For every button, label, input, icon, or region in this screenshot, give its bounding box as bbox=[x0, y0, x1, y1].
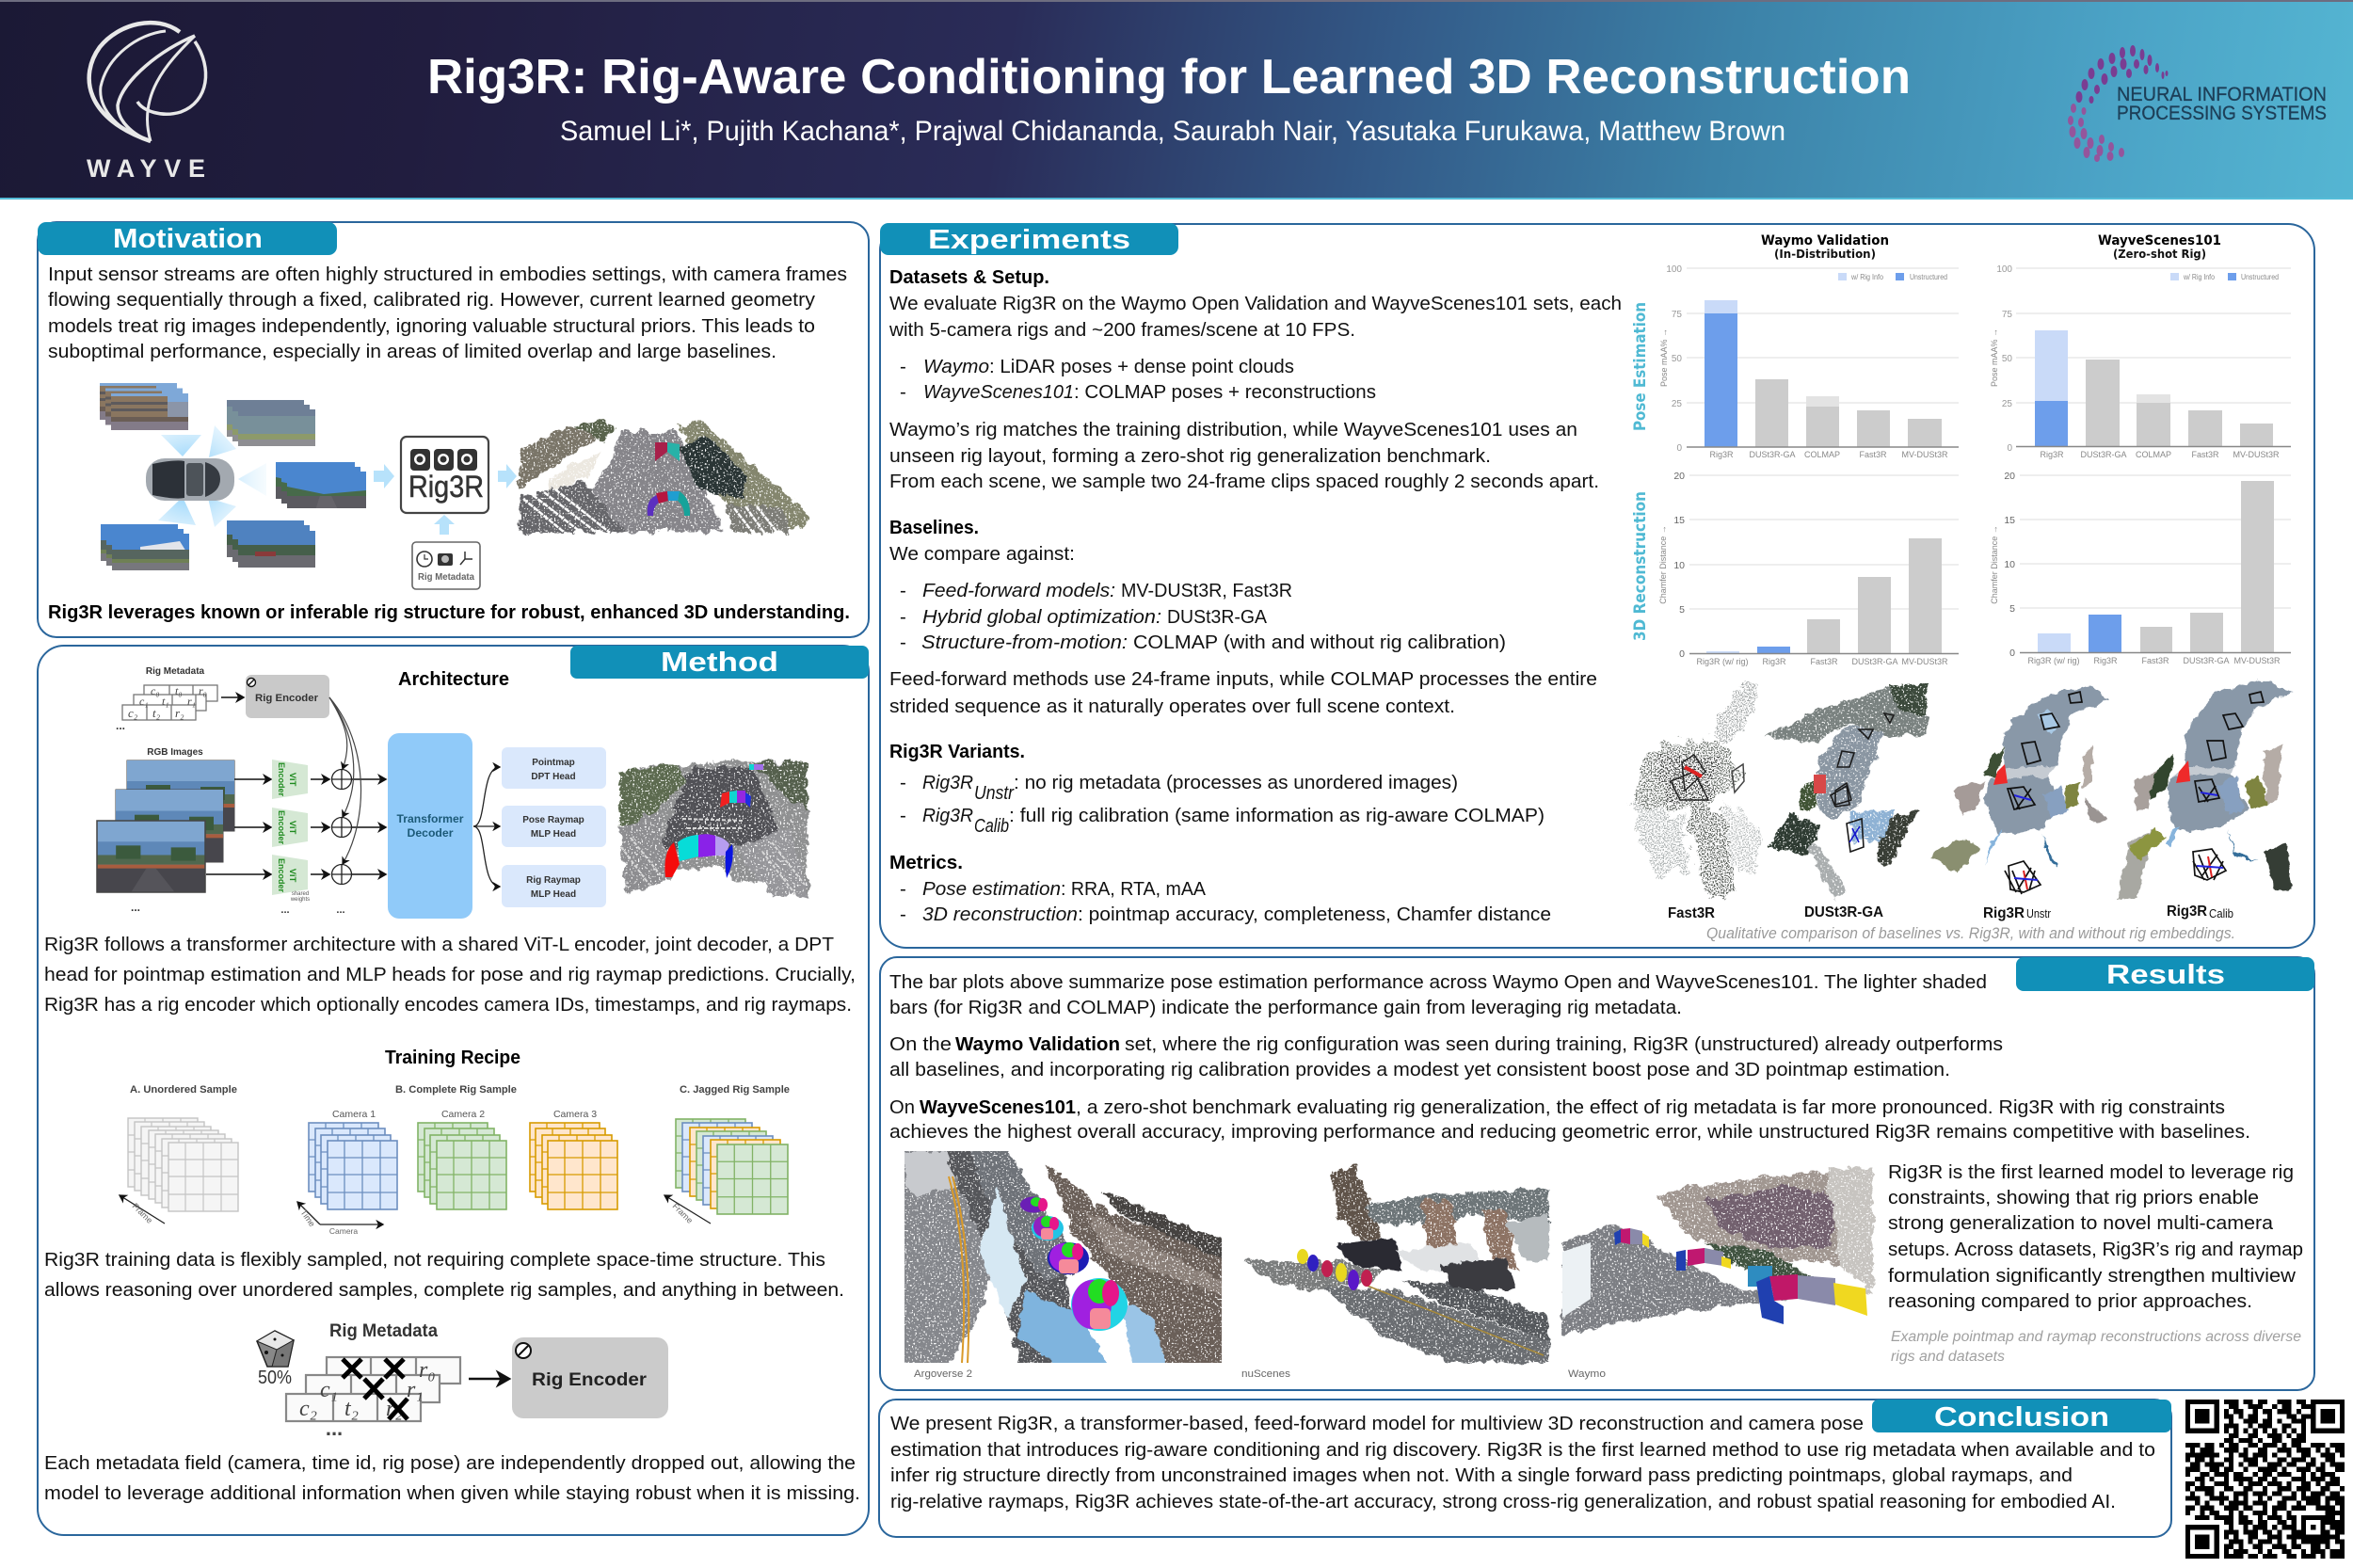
image: Fast3R reconstruction bbox=[1626, 681, 1760, 899]
icon: Rig3R box bbox=[401, 437, 488, 513]
image: Rig3R calibrated reconstruction bbox=[2118, 680, 2293, 899]
arrows: pipeline bbox=[374, 464, 517, 535]
rig metadata input: r₂ bbox=[175, 706, 184, 720]
text: rig3r variants: : full rig calibration (same information as rig-aware COLMAP) bbox=[1009, 805, 1545, 826]
diagram: metadata dropout bbox=[257, 1321, 668, 1440]
bar chart: WayveScenes pose: 50 bbox=[2002, 354, 2012, 364]
bar chart: WayveScenes chamfer: 20 bbox=[2004, 471, 2015, 482]
vit encoders: ... bbox=[336, 904, 345, 916]
text: training description: allows reasoning over unordered samples, complete rig samples, and anything in between. bbox=[44, 1279, 844, 1301]
sample B: complete rig: Camera bbox=[329, 1226, 358, 1236]
bar chart: Waymo pose: DUSt3R-GA bbox=[1749, 450, 1796, 459]
text: baselines: - bbox=[900, 580, 906, 601]
text: motivation body bbox=[48, 264, 847, 362]
caption: example reconstructions bbox=[1891, 1329, 2301, 1365]
text: baselines: Hybrid global optimization: bbox=[922, 606, 1161, 628]
bar chart: Waymo pose: 100 bbox=[1666, 264, 1682, 275]
table: metadata rows: ... bbox=[326, 1416, 343, 1440]
heading: method tab bbox=[570, 646, 869, 679]
bar chart: Waymo chamfer: 20 bbox=[1673, 471, 1685, 482]
label: pose estimation axis: Pose Estimation bbox=[1631, 302, 1650, 431]
title: Rig3R: Rig-Aware Conditioning for Learned 3D Reconstruction bbox=[427, 50, 1911, 104]
logo: Wayve: WAYVE bbox=[87, 154, 205, 183]
vit encoders: ViT bbox=[287, 773, 297, 786]
bar chart: Waymo pose: Unstructured bbox=[1910, 272, 1947, 281]
text: baselines: We compare against: bbox=[889, 543, 1075, 565]
label: rig metadata: Rig Metadata bbox=[329, 1321, 438, 1341]
text: results summary: On the bbox=[889, 1033, 952, 1055]
bar chart: WayveScenes chamfer: DUSt3R-GA bbox=[2183, 656, 2230, 665]
bar chart: Waymo chamfer: Chamfer Distance → bbox=[1658, 525, 1668, 604]
text: metrics: : RRA, RTA, mAA bbox=[1061, 878, 1206, 900]
bar chart: WayveScenes pose: 100 bbox=[1996, 264, 2012, 275]
bar chart: Waymo chamfer: 10 bbox=[1673, 560, 1685, 571]
text: conclusion body: estimation that introduces rig-aware conditioning and rig discovery. Rig3R is the first learned method to use rig metadata when available and to bbox=[890, 1439, 2155, 1461]
labels: reconstruction methods: Rig3R bbox=[1983, 905, 2025, 921]
icon: rig metadata box bbox=[412, 542, 480, 589]
bar chart: Waymo chamfer: 15 bbox=[1673, 515, 1685, 526]
rig encoder block: Rig Encoder bbox=[255, 693, 319, 704]
sample B: complete rig: Camera 1 bbox=[332, 1109, 376, 1120]
bar chart: Waymo pose: MV-DUSt3R bbox=[1901, 450, 1948, 459]
text: results summary: On bbox=[889, 1096, 915, 1118]
vit encoders: shared bbox=[292, 891, 309, 897]
bar chart: WayveScenes chamfer: Chamfer Distance → bbox=[1990, 525, 1999, 604]
table: metadata rows: c₁ bbox=[320, 1378, 338, 1402]
rig metadata input: t₂ bbox=[152, 706, 161, 720]
arrows: images to encoders bbox=[206, 779, 386, 874]
heading: architecture: Architecture bbox=[398, 668, 509, 690]
bar chart: WayveScenes pose: COLMAP bbox=[2136, 450, 2171, 459]
vit encoders: Encoder bbox=[276, 762, 286, 796]
text: rig3r variants: Unstr bbox=[974, 782, 1015, 804]
text: results summary: set, where the rig configuration was seen during training, Rig3R (unstructured) already outperforms bbox=[1125, 1033, 2003, 1055]
rig metadata input: r₁ bbox=[187, 695, 196, 708]
caption: qualitative comparison: Qualitative comparison of baselines vs. Rig3R, with and without rig embeddings. bbox=[1706, 924, 2235, 942]
labels: dataset names: Waymo bbox=[1568, 1368, 1606, 1380]
text: datasets and setup: WayveScenes101 bbox=[923, 381, 1074, 403]
heading: WayveScenes101: (Zero-shot Rig) bbox=[2113, 247, 2206, 261]
panel: experiments bbox=[880, 223, 2314, 948]
output heads: MLP Head bbox=[531, 889, 576, 900]
label: 3D reconstruction axis: 3D Reconstruction bbox=[1631, 491, 1650, 641]
label: dropout rate: 50% bbox=[258, 1368, 292, 1388]
text: baselines: Baselines. bbox=[889, 517, 979, 538]
bar chart: WayveScenes pose bbox=[1990, 264, 2291, 459]
image: DUSt3R-GA reconstruction bbox=[1765, 684, 1928, 901]
heading: results tab bbox=[2016, 957, 2314, 991]
text: baselines: strided sequence as it naturally operates over full scene context. bbox=[889, 696, 1455, 717]
vit encoders: Encoder bbox=[276, 810, 286, 844]
bar chart: Waymo pose bbox=[1659, 264, 1959, 459]
plus junctions bbox=[331, 770, 352, 885]
icon: camera view fans bbox=[158, 425, 266, 527]
text: motivation body: suboptimal performance, especially in areas of limited overlap and large baselines. bbox=[48, 341, 776, 362]
text: results summary bbox=[889, 971, 2250, 1143]
labels: reconstruction methods: Fast3R bbox=[1668, 905, 1715, 921]
text: baselines: Feed-forward methods use 24-frame inputs, while COLMAP processes the entire bbox=[889, 668, 1597, 690]
text: conclusion body: We present Rig3R, a transformer-based, feed-forward model for multiview 3D reconstruction and camera pose bbox=[890, 1413, 1864, 1434]
text: results takeaway: reasoning compared to prior approaches. bbox=[1888, 1290, 2252, 1312]
bar chart: WayveScenes pose: 0 bbox=[2007, 443, 2012, 454]
panel: conclusion bbox=[879, 1400, 2171, 1537]
labels: reconstruction methods: DUSt3R-GA bbox=[1804, 904, 1883, 920]
header banner bbox=[0, 0, 2353, 200]
bar chart: WayveScenes chamfer: MV-DUSt3R bbox=[2233, 656, 2281, 665]
text: results takeaway: Rig3R is the first learned model to leverage rig bbox=[1888, 1161, 2294, 1183]
caption: example reconstructions: Example pointmap and raymap reconstructions across diverse bbox=[1891, 1329, 2301, 1345]
text: results takeaway: strong generalization to novel multi-camera bbox=[1888, 1212, 2274, 1234]
text: baselines bbox=[889, 517, 1597, 717]
image: street point cloud bbox=[520, 419, 809, 533]
text: rig3r variants: - bbox=[900, 772, 906, 793]
diagram: training samples bbox=[120, 1084, 790, 1236]
text: architecture description bbox=[44, 934, 856, 1016]
text: baselines: Feed-forward models: bbox=[922, 580, 1115, 601]
heading: experiments tab: Experiments bbox=[928, 225, 1130, 255]
bar chart: Waymo chamfer: Rig3R (w/ rig) bbox=[1696, 657, 1749, 666]
bar chart: Waymo chamfer bbox=[1658, 471, 1959, 666]
logo: Wayve bbox=[87, 23, 206, 183]
text: datasets and setup: Waymo’s rig matches the training distribution, while WayveScenes101 uses an bbox=[889, 419, 1577, 440]
heading: results tab: Results bbox=[2106, 960, 2225, 990]
bar chart: WayveScenes pose: 25 bbox=[2002, 399, 2012, 409]
arrow: metadata to rig encoder bbox=[469, 1378, 509, 1380]
icon: rig metadata box: Rig Metadata bbox=[418, 572, 474, 583]
text: rig3r variants: Rig3R bbox=[922, 805, 973, 826]
sample A: unordered: Frame bbox=[131, 1201, 154, 1225]
image: point cloud output bbox=[619, 760, 808, 902]
text: conclusion body: rig-relative raymaps, Rig3R achieves state-of-the-art accuracy, strong cross-rig generalization, and robust spatial reasoning for embodied AI. bbox=[890, 1491, 2116, 1512]
text: metrics: : pointmap accuracy, completeness, Chamfer distance bbox=[1078, 904, 1551, 925]
table: metadata rows: r₀ bbox=[419, 1358, 436, 1383]
labels: dataset names: nuScenes bbox=[1241, 1368, 1291, 1380]
image: Rig3R unstructured reconstruction bbox=[1929, 685, 2108, 894]
sample C: jagged rig: C. Jagged Rig Sample bbox=[680, 1084, 790, 1096]
rig metadata input bbox=[116, 666, 217, 732]
panel: results bbox=[880, 957, 2314, 1390]
text: results takeaway: constraints, showing that rig priors enable bbox=[1888, 1187, 2259, 1208]
text: metrics: - bbox=[900, 878, 906, 900]
bar chart: WayveScenes chamfer: Fast3R bbox=[2141, 656, 2169, 665]
sample B: complete rig: Camera 2 bbox=[441, 1109, 485, 1120]
bar chart: WayveScenes pose: DUSt3R-GA bbox=[2080, 450, 2127, 459]
text: datasets and setup: : LiDAR poses + dense point clouds bbox=[989, 356, 1294, 377]
image: Argoverse 2 reconstruction bbox=[899, 1146, 1228, 1369]
text: architecture description: head for pointmap estimation and MLP heads for pose and rig raymap predictions. Crucially, bbox=[44, 964, 856, 985]
bar chart: WayveScenes chamfer: 0 bbox=[2009, 648, 2015, 659]
bar chart: WayveScenes pose: Rig3R bbox=[2040, 450, 2064, 459]
text: results summary: The bar plots above summarize pose estimation performance across Waymo Open and WayveScenes101. The lighter shaded bbox=[889, 971, 1987, 993]
text: results takeaway bbox=[1888, 1161, 2303, 1312]
bar chart: WayveScenes pose: Fast3R bbox=[2191, 450, 2219, 459]
bar chart: WayveScenes pose: w/ Rig Info bbox=[2183, 272, 2215, 281]
transformer decoder block bbox=[388, 733, 472, 919]
callout: motivation takeaway: Rig3R leverages known or inferable rig structure for robust, enhanced 3D understanding. bbox=[48, 601, 850, 623]
text: rig3r variants: Calib bbox=[974, 815, 1009, 837]
text: conclusion body bbox=[890, 1413, 2155, 1512]
sample C: jagged rig bbox=[664, 1084, 790, 1225]
text: results takeaway: setups. Across datasets, Rig3R’s rig and raymap bbox=[1888, 1239, 2303, 1260]
text: metrics: 3D reconstruction bbox=[922, 904, 1078, 925]
text: datasets and setup: Waymo bbox=[923, 356, 989, 377]
logo: NeurIPS: NEURAL INFORMATION bbox=[2117, 84, 2327, 105]
logo: NeurIPS bbox=[2068, 45, 2327, 162]
labels: reconstruction methods: Rig3R bbox=[2167, 904, 2207, 920]
text: datasets and setup: with 5-camera rigs and ~200 frames/scene at 10 FPS. bbox=[888, 319, 1355, 341]
heading: Waymo Validation: Waymo Validation bbox=[1761, 233, 1889, 248]
bar chart: Waymo pose: Pose mAA% → bbox=[1659, 328, 1669, 387]
labels: reconstruction methods: Calib bbox=[2209, 906, 2233, 920]
icon: dice bbox=[257, 1331, 294, 1367]
heading: WayveScenes101: WayveScenes101 bbox=[2098, 233, 2221, 248]
transformer decoder block: Decoder bbox=[407, 828, 454, 840]
heading: conclusion tab bbox=[1872, 1400, 2171, 1432]
bar chart: WayveScenes pose: MV-DUSt3R bbox=[2233, 450, 2280, 459]
rgb images input: ... bbox=[131, 901, 140, 914]
figure: rig overview bbox=[100, 383, 809, 589]
text: conclusion body: infer rig structure directly from unconstrained images when not. With a single forward pass predicting pointmaps, global raymaps, and bbox=[890, 1464, 2073, 1486]
text: rig3r variants: : no rig metadata (processes as unordered images) bbox=[1014, 772, 1458, 793]
text: motivation body: models treat rig images independently, ignoring valuable structural priors. This leads to bbox=[48, 315, 815, 337]
bar chart: Waymo chamfer: Rig3R bbox=[1762, 657, 1786, 666]
text: baselines: COLMAP (with and without rig calibration) bbox=[1133, 632, 1506, 653]
text: architecture description: Rig3R follows a transformer architecture with a shared ViT-L encoder, joint decoder, a DPT bbox=[44, 934, 834, 955]
diagram: architecture bbox=[97, 666, 808, 919]
icon: car top view bbox=[146, 458, 234, 501]
text: datasets and setup: - bbox=[900, 356, 906, 377]
rig metadata input: t₁ bbox=[162, 695, 169, 708]
rig metadata input: ... bbox=[116, 719, 125, 732]
rig encoder block bbox=[512, 1337, 668, 1418]
sample B: complete rig: B. Complete Rig Sample bbox=[395, 1084, 517, 1096]
bar chart: Waymo pose: w/ Rig Info bbox=[1850, 272, 1883, 281]
text: results summary: WayveScenes101 bbox=[920, 1096, 1076, 1118]
text: rig3r variants: - bbox=[900, 805, 906, 826]
bar chart: WayveScenes chamfer: 15 bbox=[2004, 515, 2015, 526]
arrow: metadata to encoder bbox=[221, 696, 244, 698]
arrows: decoder to heads bbox=[473, 767, 500, 887]
heading: Waymo Validation: (In-Distribution) bbox=[1774, 247, 1876, 261]
output heads bbox=[502, 747, 606, 907]
vit encoders bbox=[272, 760, 345, 916]
output heads: Pointmap bbox=[532, 758, 575, 768]
text: training description bbox=[44, 1249, 844, 1301]
bar chart: Waymo chamfer: DUSt3R-GA bbox=[1851, 657, 1898, 666]
text: datasets and setup: From each scene, we sample two 24-frame clips spaced roughly 2 seconds apart. bbox=[889, 471, 1599, 492]
vit encoders: ViT bbox=[287, 869, 297, 882]
text: motivation body: Input sensor streams are often highly structured in embodies settings, with camera frames bbox=[48, 264, 847, 285]
heading: training recipe: Training Recipe bbox=[385, 1047, 520, 1068]
text: dropout description: model to leverage additional information when given while staying robust when it is missing. bbox=[44, 1482, 860, 1504]
output heads: MLP Head bbox=[531, 829, 576, 840]
sample B: complete rig bbox=[297, 1084, 617, 1236]
sample C: jagged rig: Frame bbox=[671, 1201, 695, 1225]
table: metadata rows bbox=[286, 1357, 460, 1440]
bar chart: WayveScenes chamfer bbox=[1990, 471, 2291, 665]
logo: NeurIPS: PROCESSING SYSTEMS bbox=[2117, 103, 2327, 124]
rig metadata input: Rig Metadata bbox=[146, 666, 205, 677]
heading: method tab: Method bbox=[661, 648, 778, 678]
rig metadata input: t₀ bbox=[175, 684, 183, 697]
text: results summary: , a zero-shot benchmark evaluating rig generalization, the effect of rig metadata is far more pronounced. Rig3R with rig constraints bbox=[1076, 1096, 2225, 1118]
icon: Rig3R box: Rig3R bbox=[408, 470, 484, 504]
bar chart: Waymo chamfer: 5 bbox=[1679, 604, 1685, 616]
labels: dataset names bbox=[914, 1368, 1606, 1380]
bar chart: Waymo chamfer: 0 bbox=[1679, 648, 1685, 660]
bar chart: WayveScenes pose: Unstructured bbox=[2241, 272, 2279, 281]
vit encoders: Encoder bbox=[276, 858, 286, 892]
text: baselines: - bbox=[900, 606, 906, 628]
labels: reconstruction methods: Unstr bbox=[2026, 906, 2052, 920]
text: results takeaway: formulation significantly strengthen multiview bbox=[1888, 1265, 2296, 1287]
table: metadata rows: t₂ bbox=[344, 1397, 359, 1421]
panel: method bbox=[38, 646, 869, 1535]
heading: Waymo Validation bbox=[1761, 233, 1889, 261]
transformer decoder block: Transformer bbox=[397, 814, 464, 825]
sample A: unordered: A. Unordered Sample bbox=[130, 1084, 237, 1096]
rig metadata input: c₀ bbox=[151, 684, 160, 697]
authors: Samuel Li*, Pujith Kachana*, Prajwal Chidananda, Saurabh Nair, Yasutaka Furukawa, Matthew Brown bbox=[560, 116, 1785, 147]
text: results summary: achieves the highest overall accuracy, improving performance and reducing geometric error, while unstructured Rig3R remains competitive with baselines. bbox=[889, 1121, 2250, 1143]
sample B: complete rig: Camera 3 bbox=[553, 1109, 597, 1120]
text: datasets and setup: : COLMAP poses + reconstructions bbox=[1074, 381, 1376, 403]
rgb images input: RGB Images bbox=[147, 747, 203, 758]
vit encoders: ViT bbox=[287, 821, 297, 834]
bar chart: Waymo pose: 25 bbox=[1672, 399, 1682, 409]
text: metrics bbox=[889, 852, 1551, 925]
text: rig3r variants: Rig3R bbox=[922, 772, 973, 793]
bar chart: WayveScenes pose: Pose mAA% → bbox=[1990, 328, 1999, 387]
text: results summary: Waymo Validation bbox=[955, 1033, 1120, 1055]
heading: motivation tab bbox=[38, 222, 337, 255]
rig metadata input: r₀ bbox=[199, 684, 207, 697]
image stacks: camera frames bbox=[100, 383, 366, 570]
labels: dataset names: Argoverse 2 bbox=[914, 1368, 972, 1380]
text: results summary: bars (for Rig3R and COLMAP) indicate the performance gain from leveraging rig metadata. bbox=[889, 997, 1682, 1018]
table: metadata rows: r₂ bbox=[386, 1397, 403, 1421]
bar chart: Waymo chamfer: Fast3R bbox=[1810, 657, 1838, 666]
text: results summary: all baselines, and incorporating rig calibration provides a modest yet consistent boost pose and 3D pointmap estimation. bbox=[889, 1059, 1950, 1080]
rig encoder block: Rig Encoder bbox=[532, 1369, 647, 1390]
heading: experiments tab bbox=[880, 223, 1178, 255]
bar chart: Waymo pose: Rig3R bbox=[1709, 450, 1734, 459]
text: dropout description: Each metadata field (camera, time id, rig pose) are independently dropped out, allowing the bbox=[44, 1452, 856, 1474]
text: rig3r variants: Rig3R Variants. bbox=[889, 741, 1025, 762]
bar chart: Waymo pose: 50 bbox=[1672, 354, 1682, 364]
bar chart: WayveScenes chamfer: 10 bbox=[2004, 559, 2015, 570]
sample B: complete rig: Time bbox=[298, 1208, 317, 1228]
text: rig3r variants bbox=[889, 741, 1545, 837]
sample A: unordered bbox=[120, 1084, 238, 1225]
output heads: Rig Raymap bbox=[526, 875, 581, 886]
bar chart: WayveScenes pose: 75 bbox=[2002, 310, 2012, 320]
image: nuScenes reconstruction bbox=[1242, 1167, 1549, 1363]
text: training description: Rig3R training data is flexibly sampled, not requiring complete space-time structure. This bbox=[44, 1249, 825, 1271]
text: datasets and setup: Datasets & Setup. bbox=[889, 266, 1049, 288]
output heads: Pose Raymap bbox=[522, 815, 584, 825]
arrows: rig encoder to junctions bbox=[329, 697, 361, 864]
text: datasets and setup: unseen rig layout, forming a zero-shot rig generalization benchmark. bbox=[889, 445, 1491, 467]
rig encoder block bbox=[246, 675, 329, 718]
text: metrics: Pose estimation bbox=[922, 878, 1061, 900]
bar chart: WayveScenes chamfer: Rig3R (w/ rig) bbox=[2027, 656, 2080, 665]
bar chart: Waymo pose: 75 bbox=[1672, 310, 1682, 320]
text: datasets and setup bbox=[888, 266, 1622, 492]
table: metadata rows: r₁ bbox=[407, 1378, 424, 1402]
table: metadata rows: c₂ bbox=[299, 1397, 317, 1421]
vit encoders: weights bbox=[290, 897, 310, 903]
heading: motivation tab: Motivation bbox=[113, 224, 263, 254]
heading: WayveScenes101 bbox=[2098, 233, 2221, 261]
text: metrics: Metrics. bbox=[889, 852, 963, 873]
caption: example reconstructions: rigs and datasets bbox=[1891, 1349, 2005, 1365]
heading: conclusion tab: Conclusion bbox=[1934, 1402, 2109, 1432]
QR code bbox=[2185, 1400, 2345, 1559]
output heads: DPT Head bbox=[531, 772, 576, 782]
bar chart: Waymo pose: COLMAP bbox=[1804, 450, 1840, 459]
rgb images input bbox=[97, 747, 234, 914]
panel: motivation bbox=[38, 222, 869, 637]
text: metrics: - bbox=[900, 904, 906, 925]
bar chart: Waymo pose: 0 bbox=[1676, 443, 1682, 454]
text: datasets and setup: We evaluate Rig3R on the Waymo Open Validation and WayveScenes101 sets, each bbox=[889, 293, 1622, 314]
text: datasets and setup: - bbox=[900, 381, 906, 403]
bar chart: WayveScenes chamfer: 5 bbox=[2009, 603, 2015, 615]
text: dropout description bbox=[44, 1452, 860, 1504]
bar chart: Waymo chamfer: MV-DUSt3R bbox=[1901, 657, 1948, 666]
text: baselines: DUSt3R-GA bbox=[1167, 606, 1267, 628]
labels: reconstruction methods bbox=[1668, 904, 2233, 921]
image: Waymo reconstruction bbox=[1562, 1167, 1873, 1334]
text: baselines: - bbox=[900, 632, 906, 653]
rig metadata input: c₁ bbox=[139, 695, 149, 708]
text: baselines: Structure-from-motion: bbox=[921, 632, 1128, 653]
bar chart: Waymo pose: Fast3R bbox=[1859, 450, 1887, 459]
text: architecture description: Rig3R has a rig encoder which optionally encodes camera IDs, timestamps, and rig raymaps. bbox=[44, 994, 852, 1016]
bar chart: WayveScenes chamfer: Rig3R bbox=[2093, 656, 2118, 665]
text: baselines: MV-DUSt3R, Fast3R bbox=[1121, 580, 1292, 601]
text: motivation body: flowing sequentially through a fixed, calibrated rig. However, current learned geometry bbox=[48, 289, 816, 311]
vit encoders: ... bbox=[280, 904, 290, 916]
rig metadata input: c₂ bbox=[128, 706, 138, 720]
